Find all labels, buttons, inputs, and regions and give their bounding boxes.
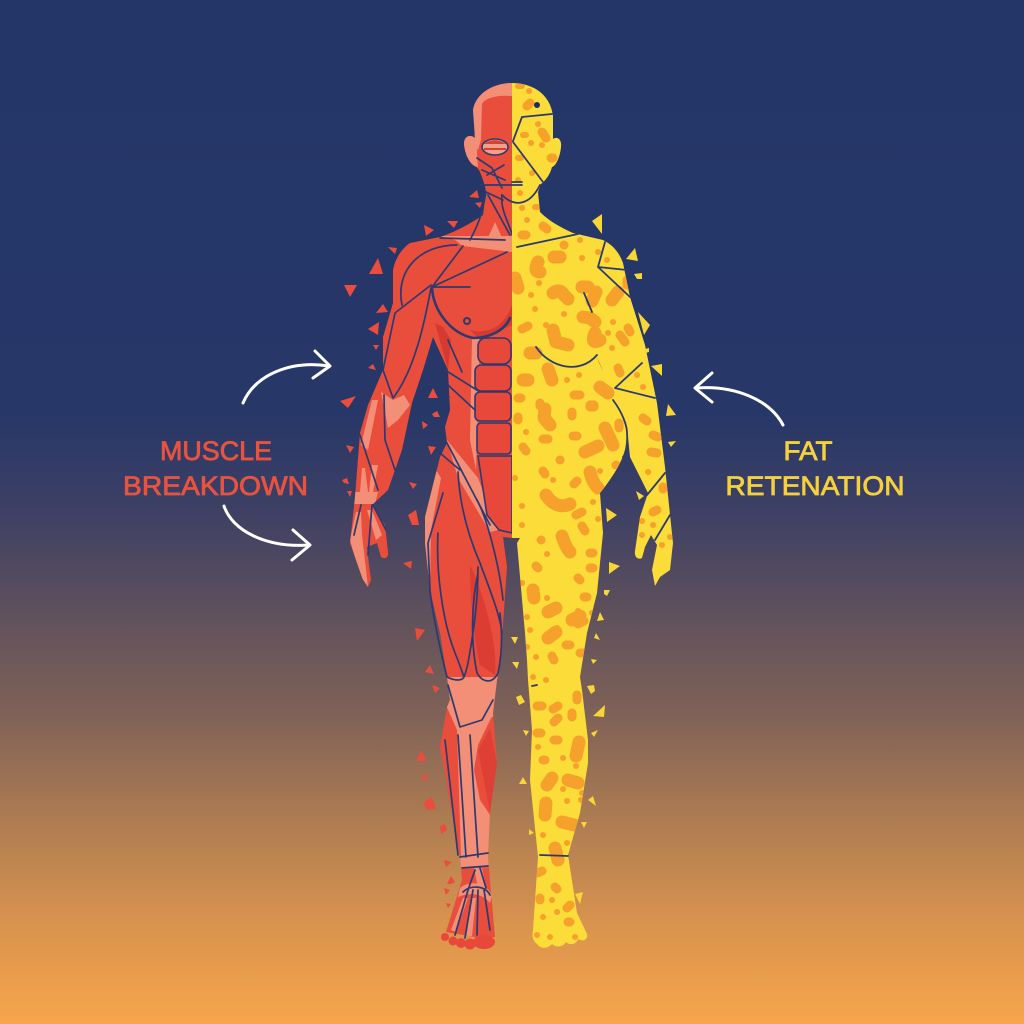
collarbone (440, 236, 512, 252)
outer thigh (425, 471, 441, 580)
label: fat retenation: FAT (784, 436, 832, 466)
large blobs (515, 257, 618, 860)
muscle outlines (354, 158, 514, 938)
label: fat retenation (726, 436, 904, 501)
label: muscle breakdown (123, 436, 308, 501)
eye (482, 139, 508, 155)
inner thigh shadow (470, 565, 495, 675)
small spots (515, 86, 670, 937)
tendons and skin patches (350, 83, 512, 936)
chest contour (432, 287, 510, 338)
arrow: fat (695, 373, 783, 425)
shin (457, 714, 493, 858)
arrow: muscle upper (243, 351, 330, 403)
abdominal gap and hip (470, 338, 480, 470)
medium spots (518, 103, 663, 922)
label: muscle breakdown: BREAKDOWN (123, 471, 308, 501)
wrist and hand (354, 492, 378, 504)
toes (441, 933, 495, 950)
arrow: muscle lower (224, 506, 310, 560)
shading on muscle (435, 305, 512, 813)
red muscle fragments (340, 190, 482, 908)
calf shadow (478, 728, 497, 813)
lat (435, 323, 451, 370)
outer forearm edge (361, 400, 378, 450)
label: muscle breakdown: MUSCLE (160, 436, 272, 466)
scalp (470, 83, 512, 150)
fat deposits (515, 86, 670, 937)
ankle (460, 855, 489, 869)
mark on head (534, 102, 540, 108)
label: fat retenation: RETENATION (726, 471, 904, 501)
knee (446, 677, 500, 730)
right half: fat tissue (502, 83, 673, 948)
inner elbow (381, 392, 410, 428)
pupil (464, 318, 470, 324)
ear (464, 134, 478, 168)
pectoral shadow (470, 305, 512, 340)
foot band (458, 883, 492, 903)
thigh contours (428, 472, 503, 681)
left half: muscle anatomy (350, 83, 514, 950)
yellow fat fragments (511, 214, 676, 904)
body contour lines (502, 114, 670, 856)
abdominal muscles (475, 338, 512, 533)
